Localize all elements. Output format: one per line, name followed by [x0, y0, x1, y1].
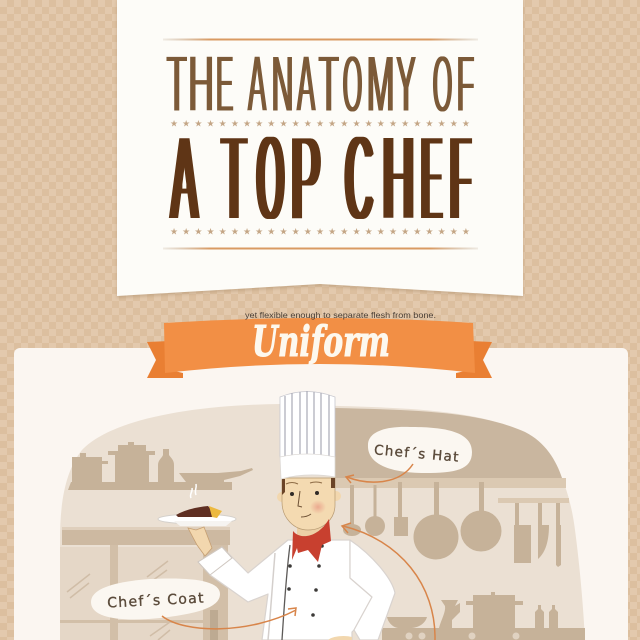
title: ★★★★★★★★★★★★★★★★★★★★★★★★★: [170, 118, 470, 128]
red neckerchief: [292, 519, 331, 562]
title: P: [292, 110, 320, 246]
title: E: [422, 110, 441, 246]
hanging utensils: [343, 482, 569, 567]
title: A: [297, 40, 315, 130]
title: A: [171, 110, 197, 246]
counter and cabinets: [60, 527, 230, 640]
left shelf with pots: [68, 442, 253, 490]
arrow: neckerchief: [342, 523, 435, 640]
lower stove with pots: [382, 592, 585, 640]
ribbon banner: [147, 318, 492, 378]
chef's coat: [198, 540, 395, 640]
callout: Chef's Hat: Chef´s Hat: [373, 442, 460, 466]
title: T: [319, 40, 339, 130]
chef figure: [188, 391, 395, 640]
title: H: [188, 40, 214, 130]
title: O: [433, 40, 452, 130]
title: H: [383, 110, 414, 246]
title: O: [343, 40, 362, 130]
title: N: [272, 40, 293, 130]
hand on hip: [328, 636, 352, 640]
title: [163, 38, 478, 250]
text: F: [457, 40, 474, 130]
panel: uniform section: [14, 348, 628, 640]
callout: Chef's Coat: [91, 578, 220, 619]
dish with steak: [158, 484, 236, 526]
title: O: [257, 110, 284, 246]
title: E: [216, 40, 233, 130]
heading: Uniform: Uniform: [252, 317, 390, 366]
chef's hat: [280, 391, 335, 479]
raised hand: [188, 527, 212, 556]
kitchen backdrop: [60, 404, 585, 640]
hanging utensils bar: [335, 478, 566, 488]
text: F: [450, 110, 470, 246]
face: [277, 478, 341, 537]
title: ★★★★★★★★★★★★★★★★★★★★★★★★★: [170, 226, 470, 236]
clipped sentence above ribbon: yet flexible enough to separate flesh from bone.: [245, 310, 436, 320]
title: Y: [396, 40, 416, 130]
callout: Chef's Hat: [368, 427, 472, 473]
arrow: hat: [346, 464, 413, 483]
title: C: [345, 110, 373, 246]
title: T: [222, 110, 246, 246]
title: A: [248, 40, 266, 130]
title: M: [367, 40, 394, 130]
kitchen upper wall panel: [335, 408, 562, 478]
title: T: [167, 40, 187, 130]
panel: title banner: [117, 0, 523, 298]
arrow: coat: [162, 608, 296, 629]
callout: Chef's Coat: Chef´s Coat: [107, 590, 205, 612]
